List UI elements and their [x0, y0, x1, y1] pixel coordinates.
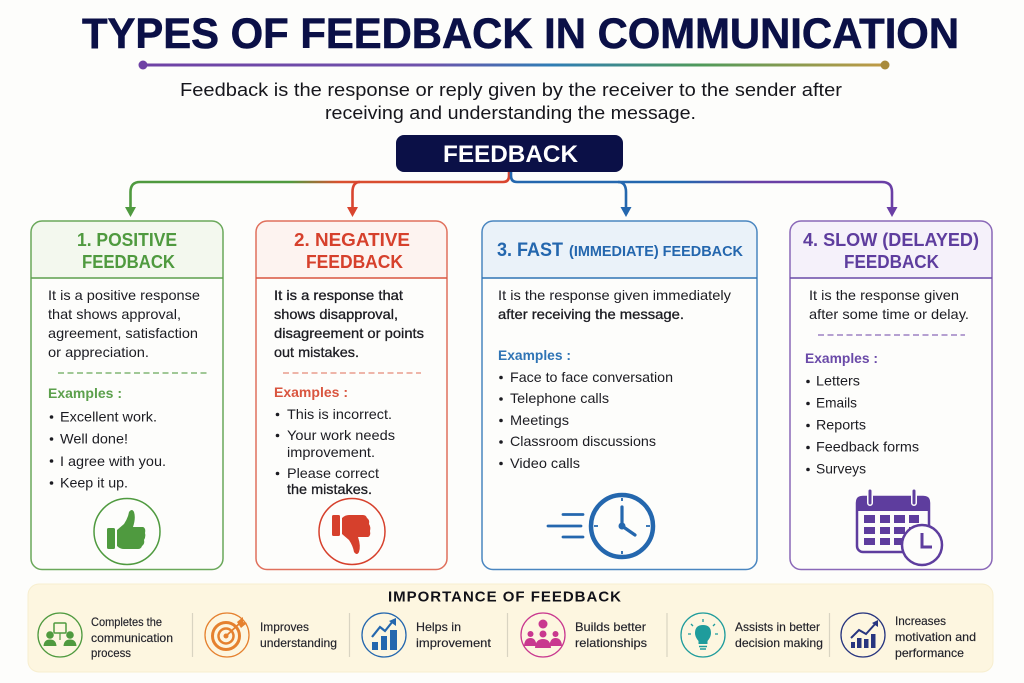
panel: negative feedback: [256, 221, 447, 570]
intro text: receiving and understanding the message.: [325, 102, 696, 123]
root box: feedback: FEEDBACK: [443, 141, 579, 168]
examples: slow: Emails: [816, 394, 857, 410]
examples: positive: [48, 385, 166, 490]
item: improves understanding: [205, 613, 337, 657]
connector arrows: [125, 172, 898, 217]
definition: negative: [274, 287, 424, 360]
examples: fast: Telephone calls: [510, 390, 609, 406]
definition: fast: It is the response given immediately: [498, 287, 731, 303]
icon: calendar with clock: [856, 491, 942, 565]
item: completes the communication process: Completes the: [91, 615, 162, 629]
examples: slow: Surveys: [816, 460, 866, 476]
item: improves understanding: understanding: [260, 636, 337, 650]
item: completes the communication process: [38, 613, 173, 660]
examples: positive: Well done!: [60, 430, 128, 446]
examples: slow: Reports: [816, 416, 866, 432]
heading: slow feedback: 4. SLOW (DELAYED): [803, 229, 979, 250]
panel: fast feedback: [482, 221, 757, 570]
item: builds better relationships: relationships: [575, 636, 647, 650]
item: increases motivation and performance: performance: [895, 646, 964, 660]
definition: slow: [809, 287, 969, 322]
examples: fast: Video calls: [510, 455, 580, 471]
examples: positive: Keep it up.: [60, 474, 128, 490]
examples: negative: the mistakes.: [287, 481, 372, 497]
examples: fast: Examples :: [498, 347, 571, 363]
examples: positive: Excellent work.: [60, 408, 157, 424]
heading: slow feedback: [803, 229, 979, 272]
definition: slow: after some time or delay.: [809, 306, 969, 322]
definition: positive: or appreciation.: [48, 344, 149, 360]
examples: negative: Your work needs: [287, 427, 395, 443]
item: builds better relationships: Builds better: [575, 620, 646, 634]
heading: importance: IMPORTANCE OF FEEDBACK: [388, 588, 621, 606]
definition: positive: [48, 287, 200, 360]
definition: positive: that shows approval,: [48, 306, 181, 322]
item: completes the communication process: communication: [91, 631, 173, 645]
title: TYPES OF FEEDBACK IN COMMUNICATION: [82, 10, 959, 58]
intro text: [180, 79, 842, 123]
definition: negative: shows disapproval,: [274, 306, 398, 322]
heading: fast feedback: [497, 239, 744, 261]
examples: slow: [805, 350, 919, 476]
heading: fast feedback: 3. FAST: [497, 239, 563, 261]
definition: positive: agreement, satisfaction: [48, 325, 198, 341]
item: builds better relationships: [521, 613, 647, 657]
panel: slow feedback: [790, 221, 992, 570]
examples: slow: Examples :: [805, 350, 878, 366]
heading: fast feedback: (IMMEDIATE) FEEDBACK: [569, 244, 744, 260]
heading: slow feedback: FEEDBACK: [844, 251, 940, 272]
heading: positive feedback: [77, 229, 177, 272]
examples: positive: I agree with you.: [60, 453, 166, 469]
examples: slow: Letters: [816, 372, 860, 388]
item: increases motivation and performance: [841, 613, 976, 660]
examples: fast: Meetings: [510, 412, 569, 428]
item: assists in better decision making: Assists in better: [735, 620, 820, 634]
heading: positive feedback: FEEDBACK: [82, 251, 176, 272]
examples: fast: Classroom discussions: [510, 433, 656, 449]
item: helps in improvement: [362, 613, 492, 657]
item: assists in better decision making: [681, 613, 823, 657]
definition: negative: out mistakes.: [274, 344, 359, 360]
item: assists in better decision making: decision making: [735, 636, 823, 650]
examples: fast: Face to face conversation: [510, 369, 673, 385]
item: increases motivation and performance: Increases: [895, 614, 946, 628]
item: helps in improvement: improvement: [416, 636, 492, 650]
examples: slow: Feedback forms: [816, 438, 919, 454]
intro text: Feedback is the response or reply given by the receiver to the sender after: [180, 79, 842, 100]
heading: positive feedback: 1. POSITIVE: [77, 229, 177, 250]
panel: positive feedback: [31, 221, 223, 570]
examples: negative: Please correct: [287, 465, 379, 481]
panel: importance of feedback: [28, 584, 993, 672]
definition: fast: [498, 287, 731, 322]
item: helps in improvement: Helps in: [416, 620, 461, 634]
examples: negative: [274, 384, 395, 497]
definition: slow: It is the response given: [809, 287, 959, 303]
item: increases motivation and performance: motivation and: [895, 630, 976, 644]
icon: thumbs down: [319, 498, 385, 564]
item: improves understanding: Improves: [260, 620, 309, 634]
examples: negative: Examples :: [274, 384, 348, 400]
title underline: [138, 60, 890, 70]
examples: positive: Examples :: [48, 385, 122, 401]
examples: negative: This is incorrect.: [287, 406, 392, 422]
definition: negative: disagreement or points: [274, 325, 424, 341]
heading: negative feedback: 2. NEGATIVE: [294, 229, 410, 250]
definition: positive: It is a positive response: [48, 287, 200, 303]
heading: negative feedback: [294, 229, 410, 272]
examples: negative: improvement.: [287, 444, 375, 460]
icon: fast clock: [548, 495, 653, 557]
item: completes the communication process: process: [91, 646, 131, 660]
examples: fast: [498, 347, 673, 471]
root box: feedback: [396, 135, 623, 172]
definition: negative: It is a response that: [274, 287, 403, 303]
icon: thumbs up: [94, 498, 160, 564]
heading: negative feedback: FEEDBACK: [306, 251, 404, 272]
definition: fast: after receiving the message.: [498, 306, 684, 322]
